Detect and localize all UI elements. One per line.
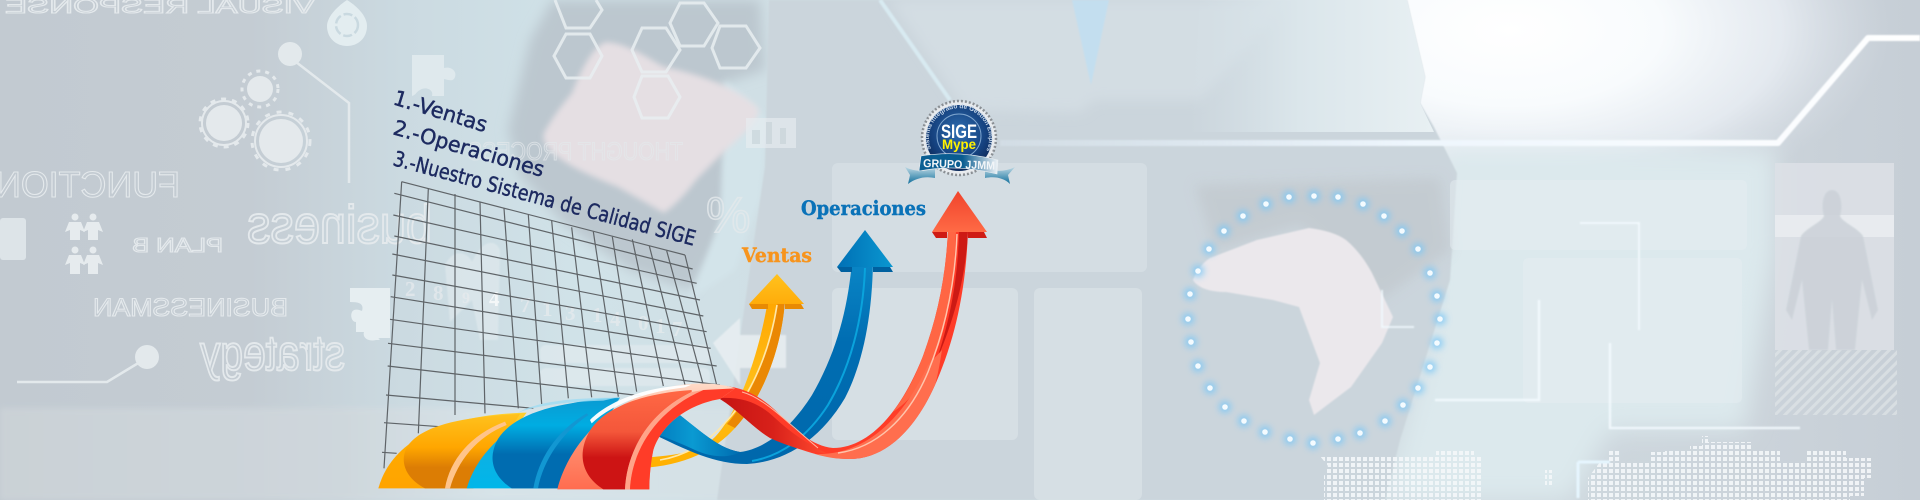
numbered list rotated	[391, 86, 698, 251]
light zone right of the man	[1385, 150, 1775, 500]
icon: node line bottom	[17, 345, 159, 382]
icon: egg ring	[327, 0, 367, 46]
faded numbers: 3	[565, 301, 576, 325]
ghost percent symbol: %	[706, 187, 750, 243]
shadow above the open hand	[1202, 182, 1445, 292]
pale area beside the hand	[698, 140, 750, 285]
red dark edge	[936, 230, 968, 362]
right sleeve highlight	[1244, 0, 1434, 132]
tie	[1072, 0, 1109, 85]
red twist shading	[720, 398, 826, 453]
blue twist highlight	[645, 400, 740, 456]
blue ribbon arm	[645, 262, 873, 464]
icon: human silhouette	[1786, 190, 1878, 350]
ghost text: business: business	[247, 195, 432, 255]
suit body	[717, 0, 1457, 500]
icon: left arrow	[713, 318, 786, 385]
mirrored ghost words and icons	[0, 0, 796, 386]
blue arrow head	[837, 230, 893, 272]
floor band	[4, 411, 538, 497]
faded numbers: 7	[520, 293, 530, 317]
red stripe	[625, 390, 703, 489]
red outer coral band	[815, 350, 942, 459]
yellow arrow head	[749, 274, 804, 309]
label: ventas: Ventas	[741, 243, 812, 267]
faded numbers: 1	[592, 303, 602, 327]
ghost text: plan b: PLAN B	[132, 235, 223, 257]
icon: puzzle bottom	[350, 288, 390, 341]
open hand	[1193, 228, 1393, 415]
ribbon band	[919, 154, 998, 174]
glowing circuit lines	[1000, 38, 1920, 498]
ribbon text: GRUPO JJMM	[923, 158, 995, 173]
yellow dark edge	[727, 300, 785, 428]
top right white light	[1407, 0, 1844, 158]
icon: hexagons	[554, 0, 760, 118]
faded numbers: 1	[542, 297, 552, 321]
red coral inner band	[893, 230, 956, 412]
arrow: ventas yellow	[640, 274, 804, 468]
red inner band	[630, 388, 735, 489]
shirt and collar	[890, 0, 1290, 112]
seal SIGE text: SIGE	[941, 122, 977, 143]
arrow: operaciones blue	[645, 230, 893, 464]
faded numbers: 9	[462, 290, 470, 307]
pointing hand	[544, 42, 759, 213]
red ribbon arm	[700, 230, 968, 459]
icon: gears	[200, 71, 310, 170]
perspective grid	[382, 182, 720, 468]
yellow ribbon arm	[640, 300, 785, 468]
blue light stripe	[752, 268, 865, 461]
faded numbers: 7	[672, 317, 682, 341]
list item 2: 2.-Operaciones	[391, 116, 547, 182]
red arrow head	[932, 191, 987, 238]
blue base	[467, 398, 620, 488]
faded numbers: 4	[489, 287, 500, 311]
faded numbers: 4	[610, 307, 621, 331]
faded numbers	[405, 277, 682, 341]
faded numbers: 1	[655, 314, 666, 338]
ribbon tails	[905, 167, 935, 184]
list item 3: 3.-Nuestro Sistema de Calidad SIGE	[391, 147, 698, 251]
icon: node line top	[278, 42, 349, 183]
red white highlight	[590, 385, 692, 423]
faded numbers: 8	[433, 281, 444, 305]
crowd dot rows	[540, 345, 710, 386]
badge: SIGE Mype Grupo JJMM	[905, 100, 1015, 184]
label: operaciones: Operaciones	[801, 196, 926, 220]
faded numbers: 0	[638, 311, 648, 335]
red dark face	[583, 390, 692, 489]
person scan panel	[1775, 163, 1897, 415]
serrated seal	[922, 101, 996, 175]
icon: people group	[65, 214, 103, 274]
ghost text: thought process: THOUGHT PROCESS	[468, 138, 683, 166]
ring of glowing dots	[1182, 190, 1446, 449]
list item 1: 1.-Ventas	[391, 86, 490, 137]
arched ribbon bases	[378, 398, 620, 488]
lapel line	[880, 0, 950, 100]
faded numbers: 2	[405, 277, 416, 301]
icon: puzzle top	[412, 55, 455, 96]
red arched base	[557, 384, 735, 489]
translucent screen panels	[832, 163, 1747, 500]
yellow light stripe	[660, 305, 777, 460]
yellow base	[378, 413, 527, 488]
world map of dots	[1320, 435, 1871, 500]
icon: square tile	[0, 218, 26, 260]
ghost text: strategy: strategy	[200, 325, 345, 381]
icon: people silhouettes	[445, 243, 500, 340]
seal Mype text: Mype	[942, 136, 976, 152]
icon: chart box	[746, 118, 796, 148]
suit sleeve	[508, 0, 765, 290]
arrow: red with arch	[700, 191, 987, 459]
ghost text: businessman: BUSINESSMAN	[93, 294, 288, 322]
red light stripe	[838, 234, 957, 453]
